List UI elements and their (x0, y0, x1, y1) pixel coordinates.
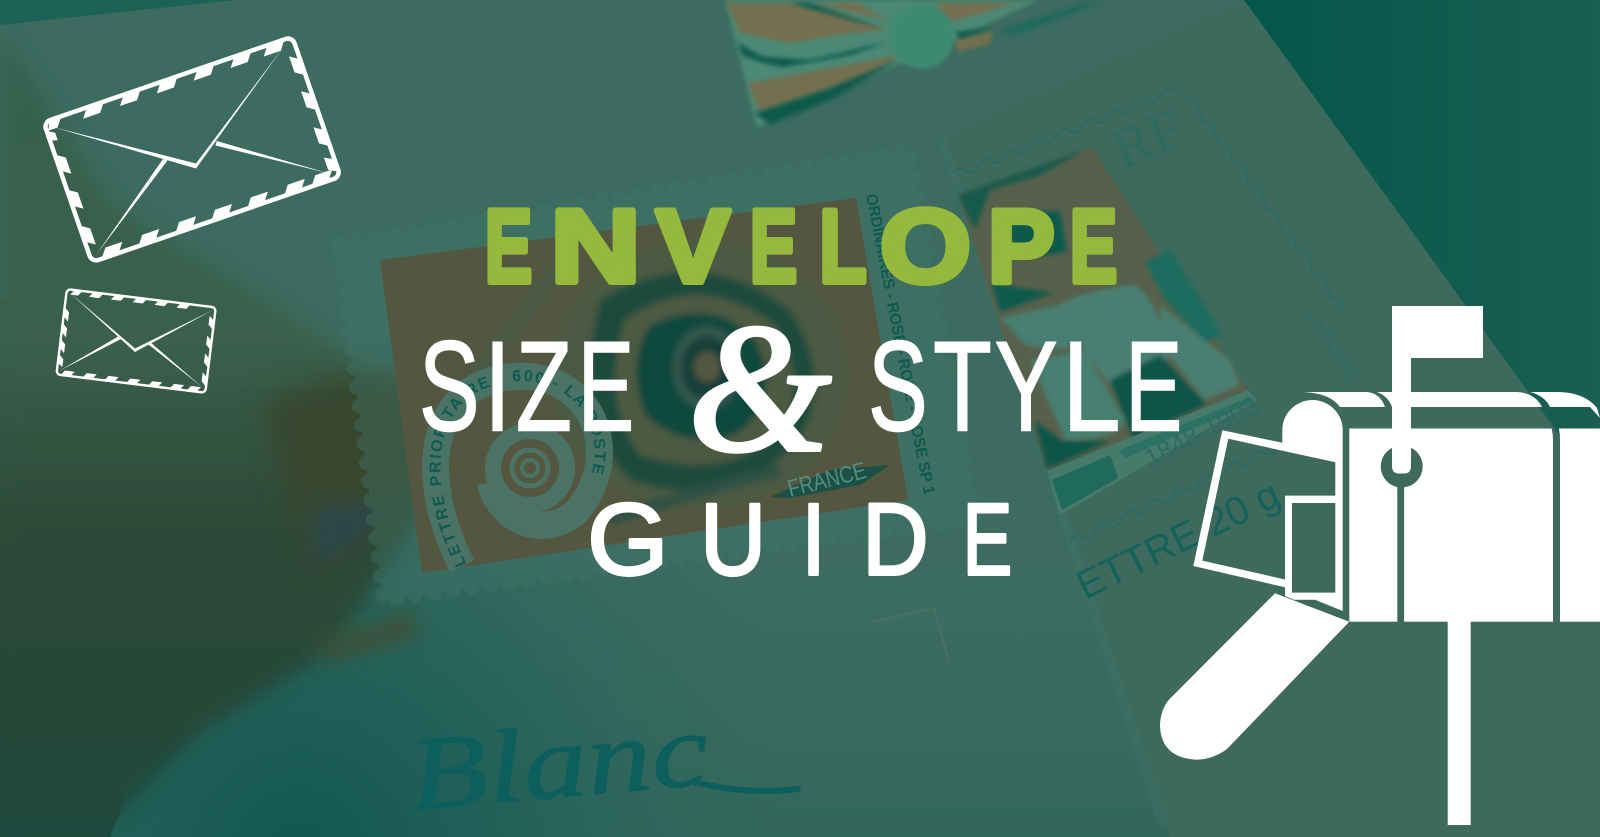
sunburst stamp, top (725, 0, 1100, 128)
title: Guide: I (802, 482, 826, 596)
mailbox body (1349, 428, 1600, 622)
handwritten address (404, 690, 798, 833)
icon: small airmail envelope (56, 289, 216, 393)
title: Guide: U (700, 482, 766, 596)
title: Guide: G (587, 482, 669, 596)
title: Envelope: N (550, 189, 641, 305)
mailbox front and letter outline (1193, 400, 1343, 611)
postal print on right envelope: RF (1103, 95, 1193, 182)
postal print on right envelope (1070, 95, 1363, 608)
title: Envelope: E (750, 189, 797, 305)
hand (0, 30, 440, 837)
wavy stamp perforation lines (953, 89, 1343, 541)
title: Envelope: E (485, 189, 532, 305)
corner mark on envelope (873, 608, 949, 662)
title: ampersand: & (688, 286, 831, 490)
title: Size: E (578, 316, 634, 458)
icon: large envelope flap lines (53, 45, 328, 255)
rose stamp (380, 193, 937, 573)
right envelope paper (940, 0, 1600, 837)
title: Envelope: V (656, 189, 730, 305)
mailbox roof (1303, 392, 1600, 418)
postal print on right envelope: ETTRE 20 g (1070, 472, 1287, 608)
icon: mailbox with letter (1160, 306, 1600, 825)
title: Envelope: E (1070, 189, 1117, 305)
spiral band on rose stamp: LETTRE PRIORITAIRE - 600 - LA POSTE (430, 370, 606, 568)
icon: large airmail envelope (44, 37, 340, 262)
front envelope edge (938, 136, 1168, 825)
title: Style: E (1125, 316, 1182, 458)
title: Envelope: L (819, 189, 867, 305)
perforated margin of rose stamp (338, 150, 975, 600)
mailbox flag (1392, 306, 1483, 474)
France banner: FRANCE (785, 457, 869, 503)
vertical stamp legend: ORDINAIRES - ROSE - ROSE - ROSE SP 1 (862, 193, 937, 496)
title: Envelope: O (880, 189, 971, 305)
postal print on right envelope: 1848-1903 (1139, 390, 1264, 473)
title: Guide: E (963, 482, 1012, 596)
mailbox post (1448, 621, 1471, 825)
dark band, top left (0, 0, 235, 25)
title: Envelope: P (988, 189, 1055, 305)
dark table, top right (1244, 0, 1600, 491)
postal print on right envelope: LA POSTE (1303, 307, 1363, 386)
title: Style: L (1062, 316, 1121, 458)
icon: small envelope flap lines (59, 293, 213, 387)
title: Size: Z (516, 316, 572, 458)
title: Style: T (933, 316, 992, 458)
mailbox door (1160, 593, 1349, 760)
title: Style: S (868, 316, 928, 458)
title: Style: Y (994, 316, 1058, 458)
title: Guide: D (862, 482, 928, 596)
title: Size: S (419, 316, 480, 458)
handwritten address: Blanc (404, 690, 713, 833)
woman stamp, right (958, 147, 1257, 515)
lower envelope shading (0, 540, 1600, 837)
teal shadow pool, lower left (0, 300, 1000, 837)
title: Size: I (484, 316, 511, 458)
